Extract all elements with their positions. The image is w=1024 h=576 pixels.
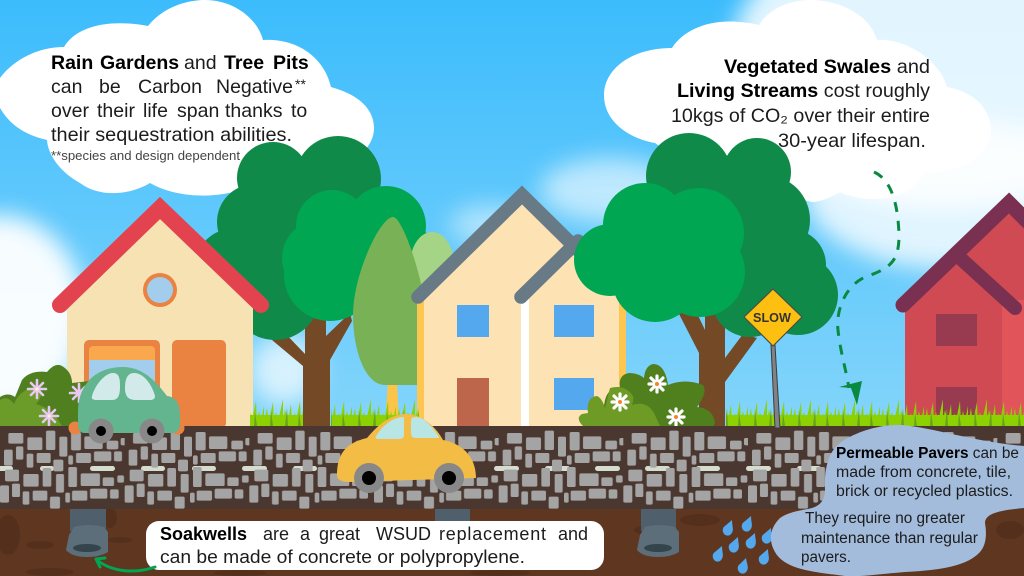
text: rain gardens: thanks	[225, 100, 283, 122]
text: vegetated swales: Vegetated Swales and	[724, 56, 930, 78]
house: centre yellow	[417, 195, 626, 426]
sign: slow: SLOW	[753, 311, 791, 325]
text: vegetated swales: 10kgs of CO₂ over their entire	[671, 105, 930, 127]
tree behind first house	[196, 136, 454, 426]
arrow: dashed to pavers	[838, 172, 899, 405]
text: rain gardens: and	[184, 52, 217, 74]
soakwell pipe left	[66, 509, 108, 557]
pavers text: made from concrete, tile,	[836, 464, 1011, 481]
text: vegetated swales	[671, 56, 930, 152]
pavers text: They require no greater	[805, 510, 965, 527]
green car	[68, 367, 184, 444]
soil layer	[0, 505, 1024, 576]
pavers text: maintenance than regular	[801, 530, 978, 547]
soakwell pipe right	[637, 509, 679, 557]
pavers text: pavers.	[801, 549, 851, 566]
text: rain gardens: over	[51, 100, 89, 122]
sign: slow	[744, 289, 802, 428]
yellow car	[337, 414, 476, 493]
text: rain gardens: to	[291, 100, 307, 122]
text: rain gardens: Gardens	[100, 52, 179, 74]
soakwell pipe centre	[435, 509, 470, 523]
icon: rain drops	[713, 516, 772, 574]
cloud: rain gardens background shape	[0, 0, 374, 196]
text: rain gardens: Tree	[224, 52, 264, 74]
cloud: swales background shape	[604, 0, 991, 202]
soakwells text: WSUD	[376, 524, 431, 544]
text: vegetated swales: Living Streams cost roughly	[677, 80, 930, 102]
text: rain gardens: **	[295, 76, 306, 92]
soakwells text: a	[300, 524, 311, 544]
sky background	[0, 0, 1024, 430]
tree beside sign	[574, 133, 838, 426]
soakwells text	[160, 524, 588, 567]
grass strips	[250, 396, 1024, 426]
text: rain gardens: span	[177, 100, 219, 122]
soakwells text: and	[558, 524, 588, 544]
text: rain gardens	[51, 52, 309, 163]
soakwells text: replacement	[439, 524, 547, 544]
text: rain gardens: Negative	[216, 76, 293, 98]
text: rain gardens: life	[143, 100, 168, 122]
soakwells text: can be made of concrete or polypropylene.	[160, 547, 525, 567]
callout: permeable pavers	[771, 425, 1024, 576]
text: vegetated swales: 30-year lifespan.	[778, 130, 926, 152]
soakwells text: are	[263, 524, 289, 544]
arrow: soakwell pointer	[96, 558, 155, 571]
text: rain gardens: **species and design dependent	[51, 148, 240, 163]
house: left with red roof	[60, 208, 261, 428]
right bush with white flowers	[579, 364, 715, 426]
text: rain gardens: Carbon	[138, 76, 202, 98]
text: rain gardens: their sequestration abilities.	[51, 124, 292, 146]
text: rain gardens: can	[51, 76, 82, 98]
text: rain gardens: Rain	[51, 52, 93, 74]
text: rain gardens: Pits	[273, 52, 309, 74]
pavers text: Permeable Pavers can be	[836, 445, 1019, 462]
text: rain gardens: their	[97, 100, 135, 122]
text: rain gardens: be	[99, 76, 121, 98]
left bush with pink flowers	[0, 365, 90, 426]
pavers text	[801, 445, 1019, 566]
pavers text: brick or recycled plastics.	[836, 483, 1013, 500]
house: right red	[903, 203, 1024, 426]
road with paving stones	[0, 426, 1024, 509]
soakwells text: Soakwells	[160, 524, 247, 544]
soakwells text: great	[319, 524, 360, 544]
tall slim tree	[353, 217, 424, 426]
callout: soakwells	[146, 521, 604, 570]
